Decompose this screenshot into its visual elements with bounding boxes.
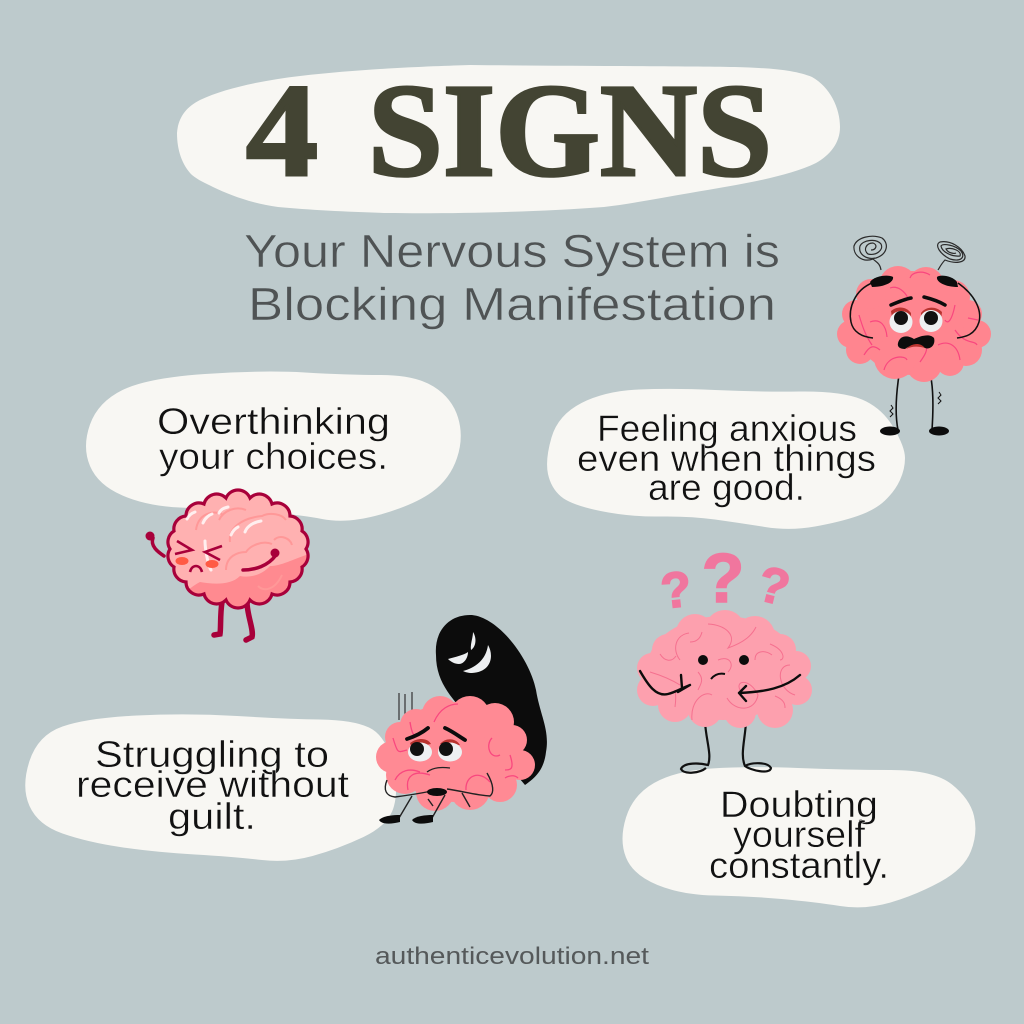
subtitle [244, 225, 780, 330]
text: anxious: even when things [577, 438, 876, 479]
face [407, 728, 465, 772]
brain folds [196, 508, 292, 589]
brain folds [393, 704, 518, 790]
text: doubting: constantly. [709, 845, 889, 886]
text: struggling: receive without [76, 764, 350, 805]
text: struggling: guilt. [168, 796, 256, 837]
panel: doubting bubble [622, 767, 975, 907]
face [175, 541, 222, 572]
brain folds [859, 272, 978, 370]
panel: struggling bubble [25, 714, 396, 861]
arms [152, 538, 276, 570]
question marks: ? [658, 561, 694, 619]
arms and legs [385, 773, 493, 818]
panel: overthinking bubble [86, 372, 461, 521]
illustration: overthinking brain [146, 490, 312, 640]
legs [681, 722, 771, 773]
question marks: ? [752, 555, 795, 617]
legs [214, 602, 252, 640]
text: anxious: are good. [648, 467, 805, 508]
text: struggling: Struggling to [95, 734, 329, 775]
shadow figure [436, 615, 547, 785]
question marks: ? [702, 539, 744, 617]
illustration: anxious brain [837, 236, 991, 436]
icon: dizzy swirls [854, 236, 965, 270]
subtitle: Your Nervous System is [244, 225, 780, 277]
footer url: authenticevolution.net [375, 943, 649, 970]
feet [880, 426, 949, 436]
text: anxious: Feeling anxious [597, 408, 857, 449]
brain body [168, 490, 312, 615]
brain body [837, 266, 991, 382]
text: doubting [709, 784, 889, 886]
subtitle: Blocking Manifestation [248, 278, 776, 330]
text: overthinking: Overthinking [157, 401, 390, 442]
legs [890, 375, 941, 430]
face [698, 655, 749, 679]
illustration: sitting brain with shadow [376, 615, 547, 824]
face [890, 297, 945, 349]
text: anxious [577, 408, 876, 508]
text: doubting: Doubting [720, 784, 878, 825]
text: overthinking [157, 401, 390, 477]
title text: SIGNS [368, 56, 772, 204]
text: struggling [76, 734, 350, 837]
text: doubting: yourself [733, 814, 866, 855]
panel: anxious bubble [547, 389, 905, 529]
brain body [637, 610, 812, 728]
brain folds [650, 624, 795, 720]
arms [640, 671, 800, 701]
text: overthinking: your choices. [159, 436, 388, 477]
worry lines [399, 692, 412, 720]
brain body [376, 696, 535, 811]
question marks [658, 539, 795, 619]
feet [379, 788, 447, 824]
illustration: confused brain [637, 539, 812, 773]
title banner [177, 56, 840, 213]
title text: 4 [246, 56, 318, 204]
hands [850, 283, 980, 338]
